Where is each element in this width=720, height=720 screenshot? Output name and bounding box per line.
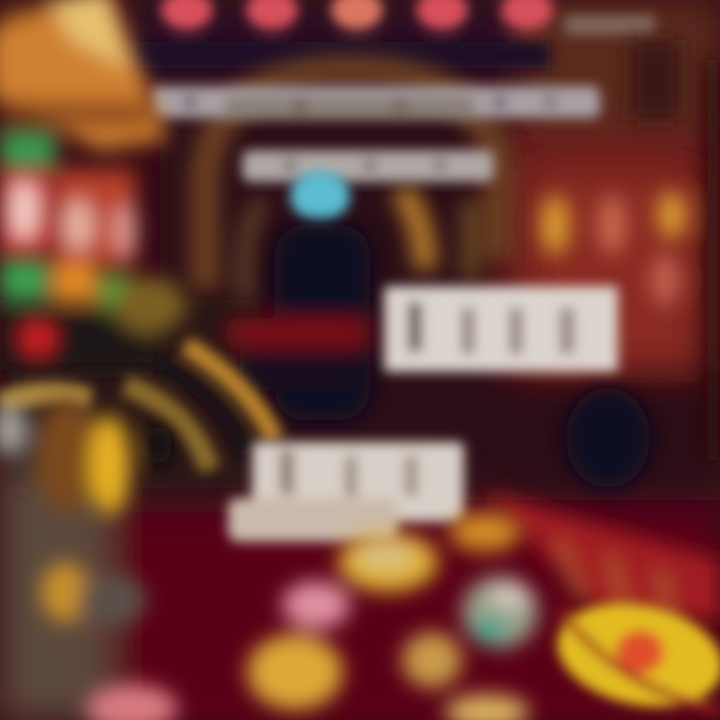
panel: curved rail (0, 345, 275, 470)
heading: blurred sign line one (150, 86, 600, 120)
panel: archway (205, 70, 500, 300)
icon: yellow oval (0, 399, 172, 515)
icon: wall lights (540, 40, 720, 460)
icon: roulette plate (547, 589, 720, 720)
icon: casino chips (41, 512, 538, 720)
heading: blurred sign line two (242, 150, 494, 182)
panel: left slot machine (0, 0, 186, 370)
icon: blue orb (290, 170, 350, 222)
panel: right red wall with lights (530, 170, 695, 365)
text block: upper white card (384, 286, 618, 372)
panel: red carpet table (480, 490, 720, 620)
figure: dark silhouette (225, 225, 370, 420)
text block: lower white card (228, 442, 464, 542)
icon: dark round shape (566, 388, 650, 488)
panel: top lights (130, 0, 655, 68)
